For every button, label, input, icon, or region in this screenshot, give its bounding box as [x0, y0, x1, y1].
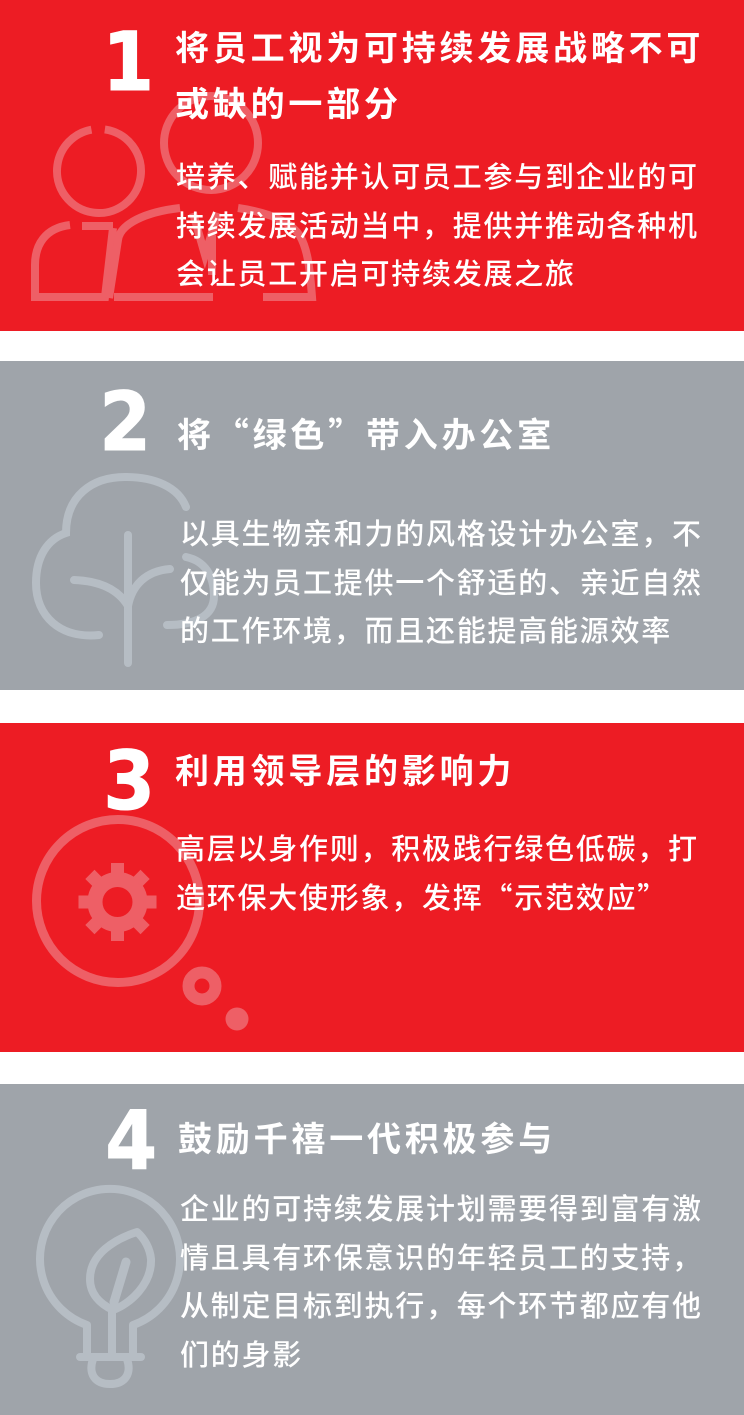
number 4: 4 — [105, 1095, 157, 1189]
number 3: 3 — [103, 735, 155, 829]
heading 4: 鼓励千禧一代积极参与 — [178, 1112, 556, 1161]
icon: thought bubble with gear — [32, 815, 248, 1030]
panel: employees — [0, 0, 744, 331]
body text 4: 们的身影 — [180, 1332, 303, 1374]
heading 3: 利用领导层的影响力 — [175, 744, 515, 793]
heading 1: 或缺的一部分 — [175, 77, 402, 126]
heading 1 — [175, 21, 704, 126]
icon: light bulb with leaf — [36, 1185, 184, 1388]
body text 4: 从制定目标到执行，每个环节都应有他 — [180, 1283, 703, 1325]
body text 2: 仅能为员工提供一个舒适的、亲近自然 — [180, 560, 703, 602]
heading 1: 将员工视为可持续发展战略不可 — [175, 21, 704, 70]
number 1: 1 — [102, 16, 154, 110]
body text 4 — [180, 1186, 703, 1374]
body text 1 — [176, 154, 699, 293]
icon: tree — [32, 473, 218, 667]
body text 1: 持续发展活动当中，提供并推动各种机 — [176, 203, 699, 245]
body text 1: 会让员工开启可持续发展之旅 — [176, 251, 576, 293]
panel: leadership — [0, 723, 744, 1052]
body text 3: 高层以身作则，积极践行绿色低碳，打 — [176, 826, 699, 868]
body text 2 — [180, 511, 703, 650]
body text 4: 情且具有环保意识的年轻员工的支持， — [180, 1235, 703, 1277]
body text 3: 造环保大使形象，发挥“示范效应” — [176, 875, 668, 917]
body text 1: 培养、赋能并认可员工参与到企业的可 — [176, 154, 699, 196]
body text 4: 企业的可持续发展计划需要得到富有激 — [180, 1186, 703, 1228]
panel: green office — [0, 361, 744, 690]
body text 3 — [176, 826, 699, 917]
icon: two people — [31, 92, 316, 301]
panel: Gen Z — [0, 1084, 744, 1415]
body text 2: 的工作环境，而且还能提高能源效率 — [180, 608, 672, 650]
heading 2: 将“绿色”带入办公室 — [177, 408, 555, 457]
number 2: 2 — [99, 376, 151, 470]
body text 2: 以具生物亲和力的风格设计办公室，不 — [180, 511, 703, 553]
